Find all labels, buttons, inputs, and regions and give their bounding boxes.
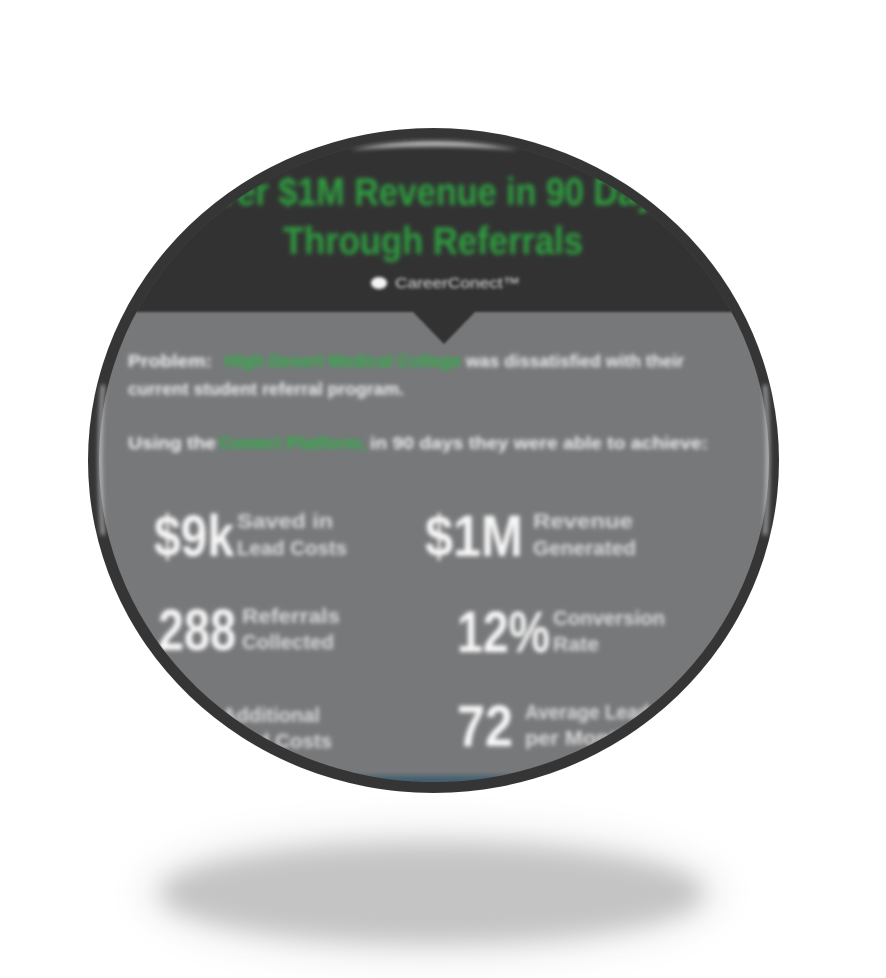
stat: 12% conversion rate: 12%	[457, 600, 550, 665]
achievement intro text: in 90 days they were able to achieve:	[370, 433, 708, 453]
stat: 72 average leads per month	[456, 702, 651, 751]
problem text block: was dissatisfied with their	[465, 351, 684, 371]
stat: additional lead costs	[222, 705, 332, 753]
panel: dark header	[136, 138, 732, 344]
stat: $1M revenue generated	[423, 510, 638, 563]
achievement intro text: Using the	[128, 433, 216, 453]
stat: $1M revenue generated: $1M	[425, 504, 523, 569]
stat: 72 average leads per month: per Month	[525, 728, 630, 750]
title	[226, 174, 648, 265]
drop shadow under the circle	[142, 827, 722, 959]
logo: CareerConect: CareerConect™	[395, 275, 520, 292]
stat: $9k saved in lead costs	[152, 510, 348, 563]
lens glare: right edge	[765, 385, 768, 535]
problem text block	[128, 351, 684, 399]
title: Through Referrals	[283, 220, 583, 263]
achievement intro text	[128, 433, 708, 453]
stat: 12% conversion rate	[457, 608, 666, 656]
stat: 288 referrals collected: Referrals	[242, 606, 340, 628]
achievement intro text: Conect Platform,	[219, 433, 366, 453]
problem text block: High Desert Medical College	[225, 351, 461, 371]
circular lens frame	[80, 120, 790, 800]
stat: $9k saved in lead costs: Saved in	[237, 511, 333, 533]
stat: 72 average leads per month: Average Leads	[525, 702, 660, 724]
stat: 72 average leads per month: 72	[457, 694, 513, 759]
stat: $9k saved in lead costs: Lead Costs	[237, 538, 347, 560]
stat: additional lead costs: Lead Costs	[222, 731, 332, 753]
bottom blue strip	[352, 772, 516, 782]
stat: 288 referrals collected	[158, 606, 341, 654]
lens glare: top crescent	[350, 141, 518, 150]
stat: $9k saved in lead costs: $9k	[154, 504, 235, 569]
title: Over $1M Revenue in 90 Days	[191, 171, 675, 214]
stat: 288 referrals collected: Collected	[242, 632, 334, 654]
stat: $1M revenue generated: Generated	[533, 538, 636, 560]
stat: 12% conversion rate: Rate	[553, 634, 599, 656]
stat: $1M revenue generated: Revenue	[533, 511, 633, 533]
stat: 288 referrals collected: 288	[158, 598, 236, 663]
panel: grey body	[99, 138, 769, 782]
problem text block: current student referral program.	[128, 379, 404, 399]
problem text block: Problem:	[128, 351, 212, 371]
panel: magnified infographic	[99, 138, 769, 782]
stat: 12% conversion rate: Conversion	[553, 608, 665, 630]
stat: additional lead costs: Additional	[222, 705, 320, 727]
lens glare: left edge	[100, 385, 103, 535]
